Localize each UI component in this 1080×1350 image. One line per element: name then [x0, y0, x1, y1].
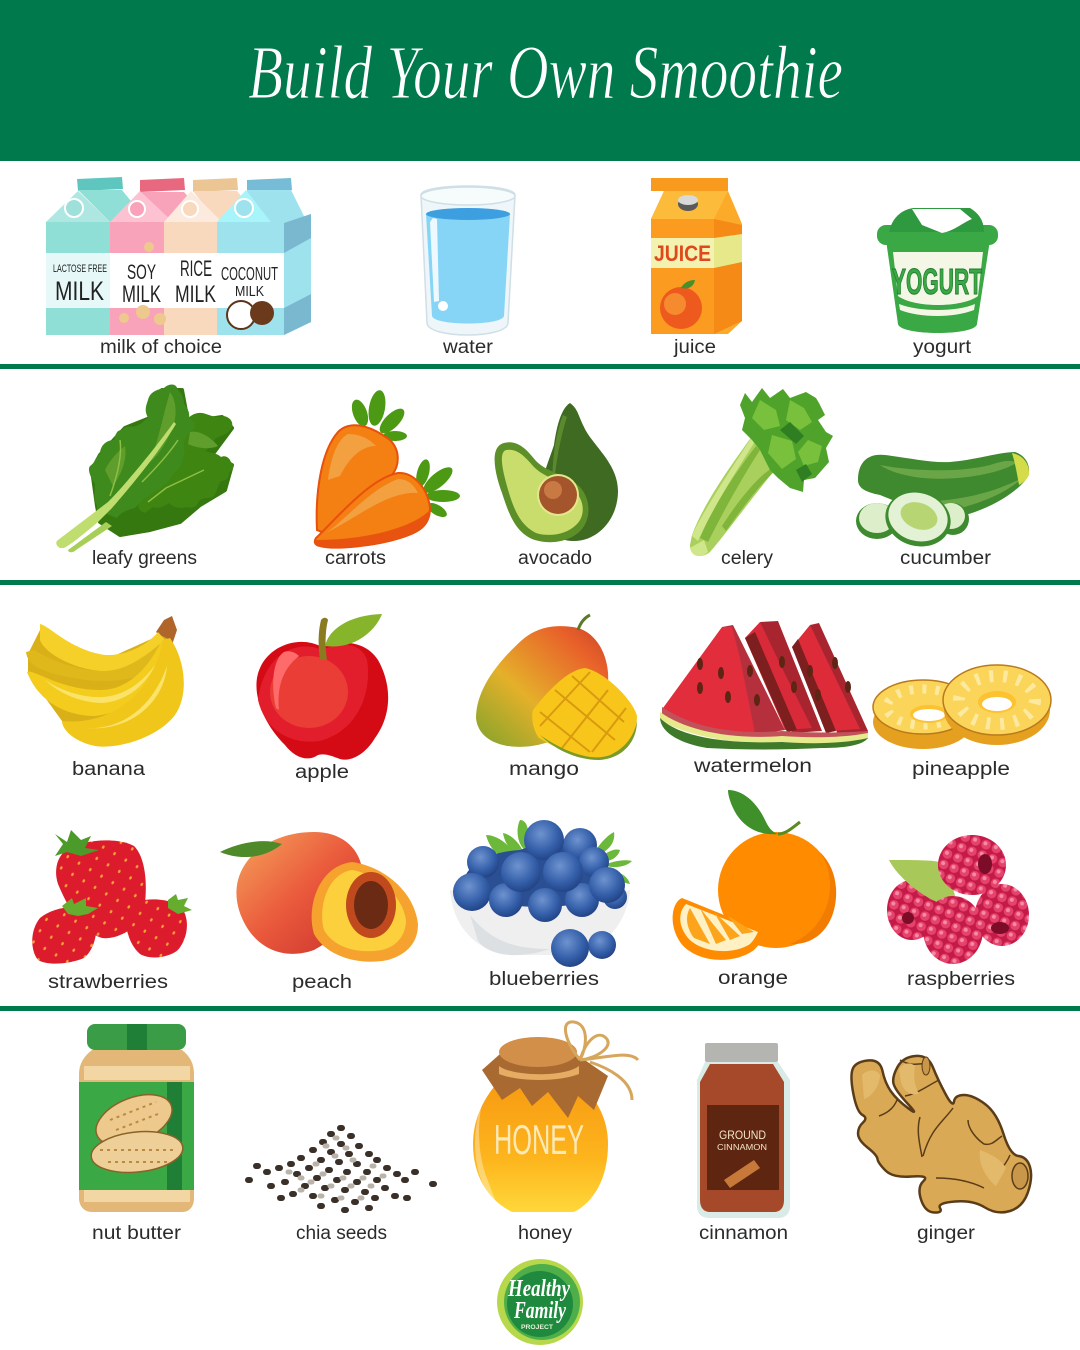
icon: milk cartons: MILK — [122, 281, 161, 308]
label: pineapple — [912, 759, 1010, 780]
label: apple — [295, 762, 349, 783]
panel: fruits — [26, 614, 1051, 993]
icon: strawberries — [32, 830, 192, 964]
icon: yogurt cup — [877, 208, 998, 333]
label: cucumber — [900, 548, 992, 569]
icon: yogurt cup: YOGURT — [892, 261, 982, 302]
label: chia seeds — [296, 1223, 387, 1244]
icon: milk cartons: SOY — [127, 261, 156, 284]
label: celery — [721, 548, 774, 569]
logo: Healthy Family Project: Family — [513, 1298, 566, 1324]
icon: blueberries bowl — [450, 820, 632, 967]
label: ginger — [917, 1223, 976, 1244]
icon: glass of water — [421, 186, 515, 335]
label: carrots — [325, 548, 386, 569]
icon: juice carton — [651, 178, 742, 334]
icon: juice carton: JUICE — [654, 241, 711, 266]
label: blueberries — [489, 969, 599, 990]
label: milk of choice — [100, 337, 222, 358]
label: avocado — [518, 548, 592, 569]
label: nut butter — [92, 1223, 182, 1244]
icon: honey jar: HONEY — [494, 1116, 584, 1163]
icon: cinnamon jar: CINNAMON — [717, 1143, 767, 1152]
label: orange — [718, 968, 788, 989]
label: banana — [72, 759, 145, 780]
panel: liquid bases — [46, 177, 998, 358]
icon: cucumber — [856, 452, 1029, 554]
label: cinnamon — [699, 1223, 788, 1244]
logo: Healthy Family Project: Healthy — [507, 1276, 570, 1302]
icon: apple — [256, 614, 388, 760]
label: peach — [292, 972, 352, 993]
icon: celery — [690, 388, 833, 556]
title: Build Your Own Smoothie — [248, 31, 843, 115]
logo: Healthy Family Project: PROJECT — [521, 1324, 553, 1331]
label: watermelon — [693, 756, 812, 777]
icon: milk cartons: MILK — [55, 276, 104, 306]
icon: chia seeds — [248, 1128, 434, 1210]
icon: milk cartons: MILK — [175, 281, 216, 308]
icon: carrots — [315, 389, 460, 548]
icon: raspberries — [887, 835, 1029, 964]
icon: ginger root — [851, 1056, 1031, 1213]
icon: mango — [476, 615, 637, 760]
icon: cinnamon jar: GROUND — [719, 1128, 766, 1142]
icon: leafy greens — [56, 384, 233, 552]
label: strawberries — [48, 972, 168, 993]
icon: milk cartons: RICE — [180, 256, 212, 281]
icon: nut butter jar — [79, 1024, 194, 1212]
icon: orange — [673, 790, 836, 960]
icon: peach — [220, 832, 418, 962]
label: water — [442, 337, 494, 358]
label: leafy greens — [92, 548, 197, 569]
panel: vegetables — [56, 384, 1029, 569]
icon: pineapple rings — [873, 665, 1051, 749]
label: raspberries — [907, 969, 1015, 990]
panel: add-ins — [79, 1022, 1031, 1244]
icon: banana — [26, 616, 184, 747]
icon: milk cartons: LACTOSE FREE — [53, 263, 107, 275]
label: mango — [509, 759, 579, 780]
icon: honey jar — [473, 1022, 638, 1212]
label: yogurt — [913, 337, 972, 358]
icon: milk cartons: MILK — [235, 283, 264, 300]
icon: watermelon — [660, 621, 868, 750]
icon: avocado — [495, 403, 618, 542]
logo: Healthy Family Project — [497, 1259, 583, 1345]
icon: milk cartons — [46, 177, 311, 335]
header banner — [0, 0, 1080, 161]
label: honey — [518, 1223, 573, 1244]
icon: cinnamon jar — [697, 1043, 790, 1218]
icon: milk cartons: COCONUT — [221, 264, 278, 284]
label: juice — [673, 337, 716, 358]
